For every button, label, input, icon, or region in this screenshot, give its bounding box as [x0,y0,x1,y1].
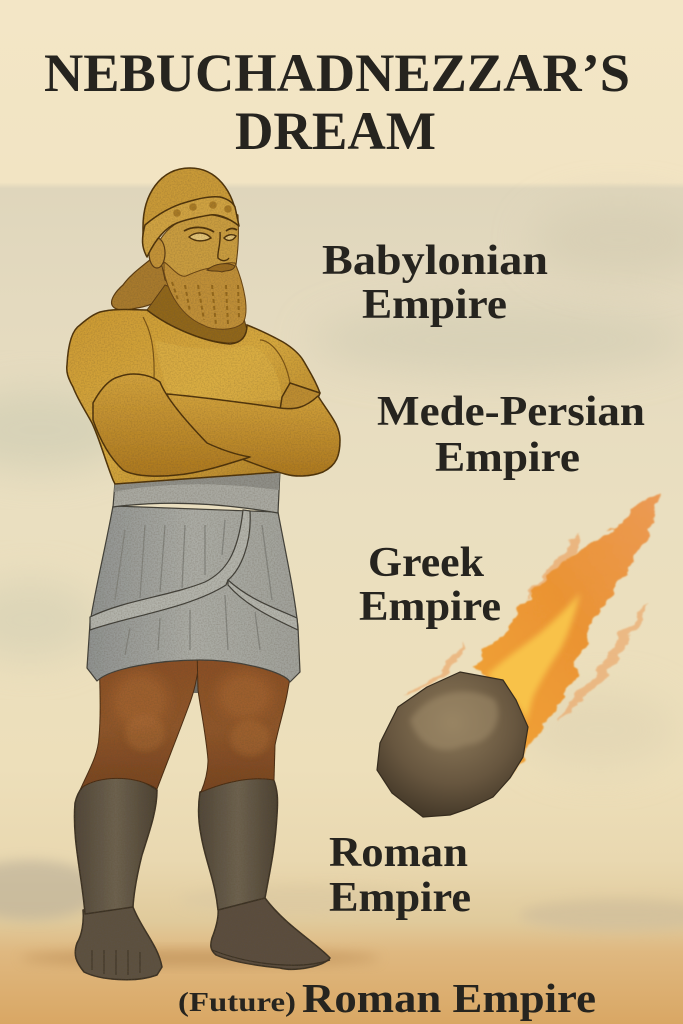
label: Mede-Persian Empire [377,389,645,481]
moustache and mouth [207,264,235,272]
label: Babylonian Empire [322,238,548,328]
label: Greek Empire [359,540,501,630]
flames [403,493,660,782]
title: DREAM [235,101,436,161]
label: Mede-Persian Empire: Empire [435,435,580,481]
silver belt [113,470,280,513]
label: (Future) Roman Empire: Roman Empire [302,975,596,1021]
label: (Future) Roman Empire: (Future) [178,987,296,1017]
eyes and nose [184,227,237,261]
label: Babylonian Empire: Empire [362,282,507,328]
label: (Future) Roman Empire [178,975,596,1021]
beard [164,262,246,329]
label: Roman Empire: Empire [329,875,471,921]
hair [112,255,172,310]
label: Babylonian Empire: Babylonian [322,238,548,284]
iron boots and feet [74,775,330,980]
label: Greek Empire: Greek [368,540,485,586]
rock highlight [410,692,498,750]
beard curls [172,282,239,325]
bronze legs [81,650,291,792]
title [44,43,630,161]
golden chest [155,340,282,402]
silver skirt [87,506,300,682]
title: NEBUCHADNEZZAR’S [44,43,630,103]
helmet [143,168,239,257]
face [159,211,238,300]
golden torso [67,310,320,484]
label: Roman Empire: Roman [329,830,468,876]
ear [149,238,165,268]
sleeve seams [143,317,290,383]
stone with fire tail [377,493,660,817]
label: Greek Empire: Empire [359,584,501,630]
label: Roman Empire [329,830,471,921]
neck [147,285,247,343]
rock [377,672,528,817]
statue figure [67,168,340,980]
label: Mede-Persian Empire: Mede-Persian [377,389,645,435]
crossed arms [93,374,340,476]
